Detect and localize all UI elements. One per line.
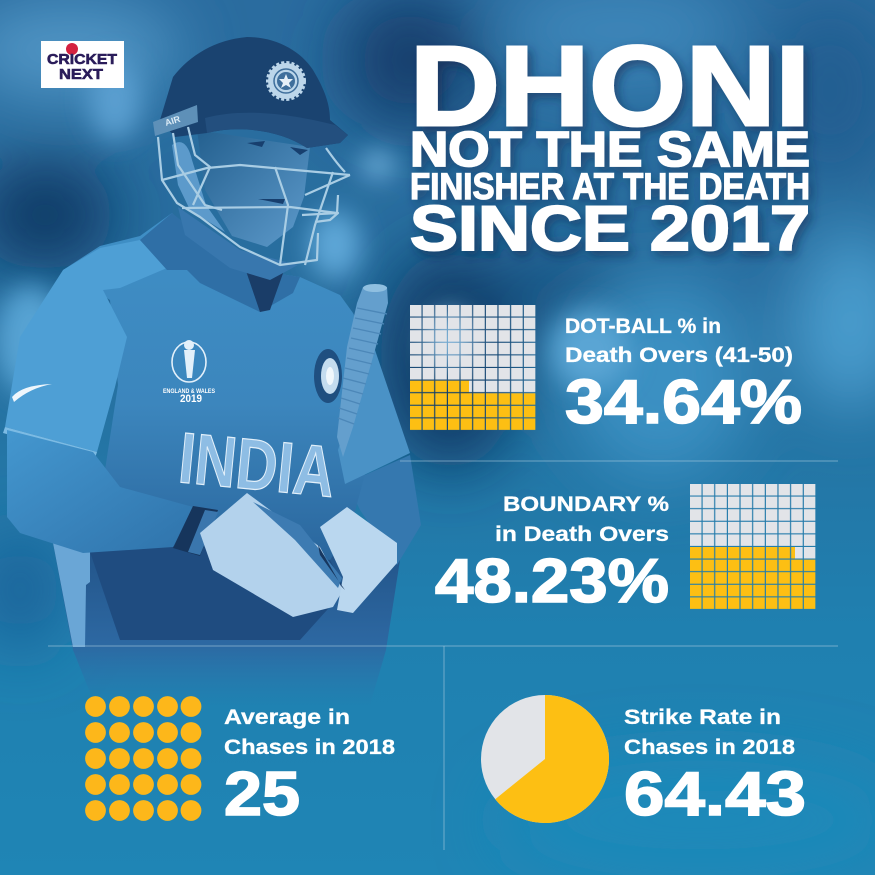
collar bbox=[140, 213, 300, 312]
lower body and trousers bbox=[53, 500, 400, 705]
World Cup 2019 logo: ENGLAND & WALES bbox=[163, 388, 216, 395]
helmet AIR plate bbox=[153, 105, 198, 136]
average label: Chases in 2018 bbox=[224, 736, 395, 759]
helmet badge bbox=[268, 63, 304, 99]
left sleeve bbox=[5, 240, 167, 452]
forearm bbox=[7, 430, 193, 553]
panel: strike rate in chases bbox=[481, 695, 806, 829]
average label bbox=[224, 706, 395, 759]
strike rate value: 64.43 bbox=[624, 760, 806, 829]
dot grid icon: average 25 bbox=[85, 696, 201, 821]
dot-ball label: DOT-BALL % in bbox=[565, 315, 721, 338]
helmet grille bbox=[158, 127, 350, 265]
average label: Average in bbox=[224, 706, 350, 729]
World Cup 2019 logo bbox=[163, 340, 216, 405]
title bbox=[410, 23, 810, 264]
average value: 25 bbox=[224, 760, 300, 829]
title: DHONI bbox=[410, 23, 810, 149]
eyes and mouth bbox=[247, 141, 308, 204]
waffle chart: boundary 48.23% bbox=[690, 484, 816, 610]
boundary label: in Death Overs bbox=[495, 523, 669, 546]
panel: dot-ball percentage bbox=[410, 305, 802, 437]
dot-ball label: Death Overs (41-50) bbox=[565, 344, 793, 367]
player photo: Dhoni in helmet and jersey bbox=[3, 37, 421, 705]
title: SINCE 2017 bbox=[410, 194, 810, 264]
right sleeve bbox=[338, 313, 410, 484]
panel: average in chases bbox=[85, 696, 395, 829]
neck and lower face bbox=[178, 207, 298, 280]
title: NOT THE SAME bbox=[410, 123, 810, 177]
brand logo: CricketNext: NEXT bbox=[59, 66, 103, 83]
INDIA jersey text: INDIA bbox=[175, 418, 338, 513]
face bbox=[197, 130, 310, 247]
World Cup 2019 logo: 2019 bbox=[180, 393, 202, 405]
panel: boundary percentage bbox=[435, 484, 816, 616]
ear bbox=[172, 142, 225, 232]
shirt hem bbox=[53, 543, 90, 647]
strike rate label: Chases in 2018 bbox=[624, 736, 795, 759]
brand logo: CricketNext: CRICKET bbox=[47, 51, 117, 68]
batting gloves bbox=[200, 493, 397, 617]
helmet AIR plate: AIR bbox=[164, 114, 182, 128]
wristband bbox=[173, 506, 218, 556]
boundary label bbox=[495, 493, 669, 546]
boundary value: 48.23% bbox=[435, 547, 669, 616]
title: FINISHER AT THE DEATH bbox=[410, 166, 810, 207]
pie chart: strike rate 64.43 bbox=[481, 695, 609, 823]
helmet dome bbox=[160, 37, 348, 148]
boundary label: BOUNDARY % bbox=[503, 493, 669, 516]
dot-ball label bbox=[565, 315, 793, 367]
brand logo: CricketNext bbox=[41, 41, 124, 88]
strike rate label: Strike Rate in bbox=[624, 706, 781, 729]
India crest bbox=[314, 349, 342, 403]
waffle chart: dot-ball 34.64% bbox=[410, 305, 536, 431]
bat handle bbox=[337, 284, 388, 457]
right arm bbox=[347, 455, 421, 565]
jersey torso bbox=[63, 213, 385, 560]
dot-ball value: 34.64% bbox=[565, 368, 802, 437]
strike rate label bbox=[624, 706, 795, 759]
swoosh logo bbox=[12, 384, 52, 402]
